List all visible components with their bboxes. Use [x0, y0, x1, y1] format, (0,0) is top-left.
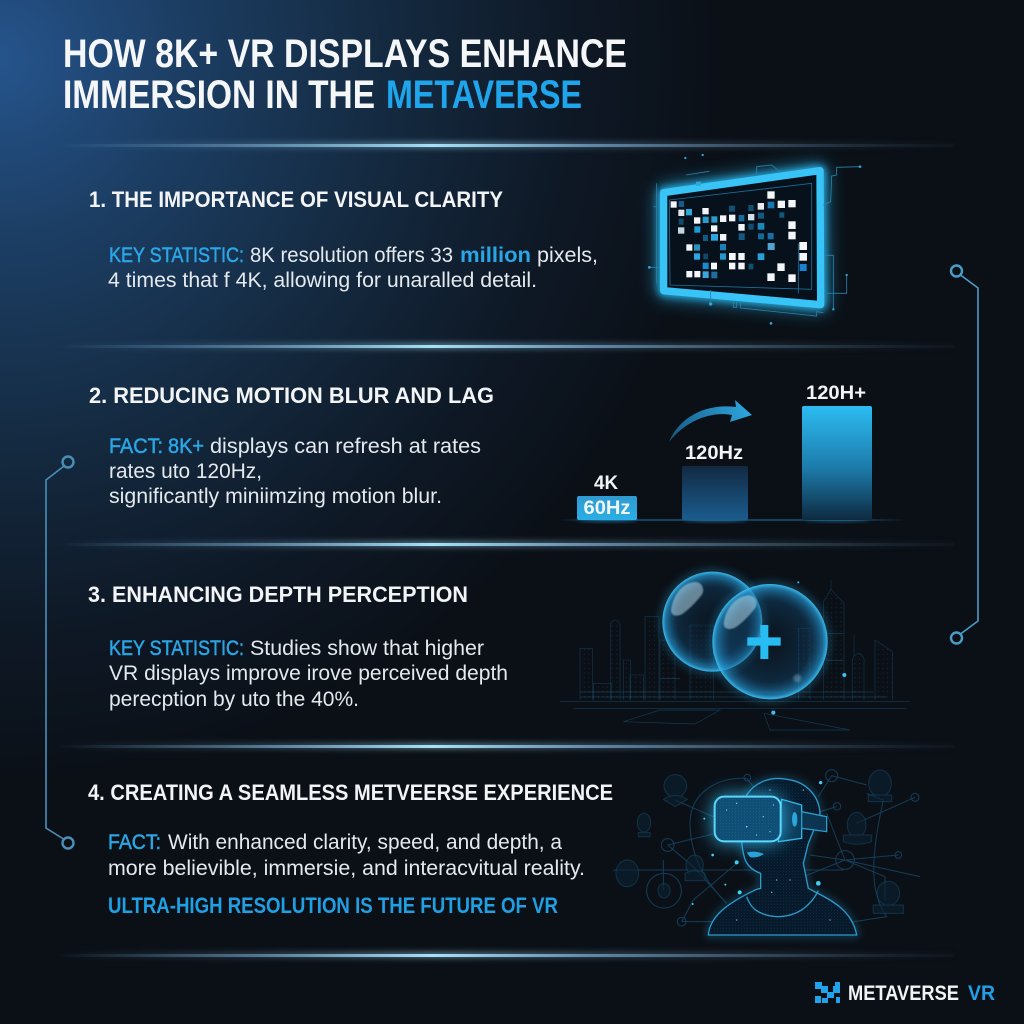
text block 1: KEY STATISTIC: [109, 244, 244, 267]
connector: right bracket [951, 266, 978, 644]
text block 3 [109, 637, 508, 711]
arrow [669, 400, 752, 442]
network [613, 770, 920, 926]
bar: 120H+ [802, 383, 872, 520]
illustration: city skyline and bubbles [560, 572, 910, 730]
pixels: white [671, 191, 807, 282]
bar chart: refresh rates [556, 383, 906, 522]
title: METAVERSE [386, 73, 582, 117]
heading 2: 2. REDUCING MOTION BLUR AND LAG [89, 383, 494, 408]
text block 2: significantly miniimzing motion blur. [109, 485, 442, 508]
text block 2: rates uto 120Hz, [109, 460, 262, 483]
bar: 120Hz: 120Hz [685, 443, 743, 464]
bar: 4K 60Hz: 60Hz [584, 498, 630, 519]
section 4: metaverse experience [88, 780, 613, 918]
headset [713, 795, 827, 843]
city skyline [560, 580, 910, 730]
text block 1: 4 times that f 4K, allowing for unaralled detail. [108, 269, 537, 292]
heading 1: 1. THE IMPORTANCE OF VISUAL CLARITY [89, 187, 503, 212]
icon: logo mark [815, 982, 840, 1003]
text block 4 [108, 831, 585, 918]
text block 1: 8K resolution offers 33 [250, 244, 453, 267]
logo: VR [968, 982, 995, 1005]
title: IMMERSION IN THE [63, 73, 375, 117]
section 1: visual clarity [89, 187, 598, 292]
text block 1: pixels, [537, 244, 598, 267]
text block 1 [108, 244, 598, 292]
text block 3: VR displays improve irove perceived depth [109, 662, 508, 685]
pixels: blue [679, 201, 807, 278]
title [63, 32, 627, 117]
connector: left bracket [46, 456, 74, 848]
text block 2: FACT: [109, 435, 163, 458]
bubble: left [662, 572, 762, 672]
person [708, 778, 857, 935]
text block 4: FACT: [108, 831, 161, 854]
section 3: depth perception [88, 582, 508, 711]
bar: 4K 60Hz [577, 473, 637, 520]
bar: 120H+: 120H+ [806, 383, 866, 404]
text block 3: Studies show that higher [250, 637, 484, 660]
text block 2: 8K+ [168, 435, 204, 458]
text block 3: perecption by uto the 40%. [109, 688, 359, 711]
text block 3: KEY STATISTIC: [109, 637, 244, 660]
text block 4: With enhanced clarity, speed, and depth, a [168, 831, 562, 854]
illustration: VR user and network [613, 770, 920, 935]
heading 4: 4. CREATING A SEAMLESS METVEERSE EXPERIENCE [88, 780, 613, 805]
section 2: motion blur [89, 383, 494, 508]
heading 3: 3. ENHANCING DEPTH PERCEPTION [88, 582, 468, 607]
text block 4: more believible, immersie, and interacvitual reality. [108, 857, 585, 880]
text block 2 [109, 435, 481, 508]
icon: plus [747, 625, 781, 659]
logo: METAVERSE [848, 982, 959, 1005]
bubble: right [712, 584, 828, 699]
bar: 4K 60Hz: 4K [594, 473, 618, 494]
callout: ULTRA-HIGH RESOLUTION IS THE FUTURE OF VR [108, 893, 558, 918]
text block 1: million [460, 244, 531, 267]
icon: 8K display screen [648, 154, 861, 325]
text block 2: displays can refresh at rates [210, 435, 481, 458]
bar: 120Hz [682, 443, 748, 520]
title: HOW 8K+ VR DISPLAYS ENHANCE [63, 32, 627, 76]
